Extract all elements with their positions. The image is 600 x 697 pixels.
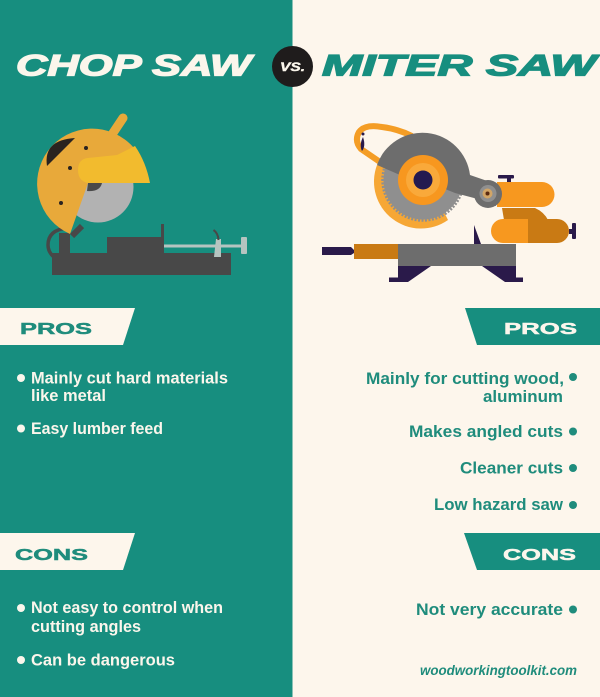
text: miter saw pros list: Low hazard saw (434, 496, 563, 514)
text: chop saw pros list: Easy lumber feed (31, 420, 163, 438)
banner: chop saw cons (0, 533, 135, 570)
text: chop saw cons list: Can be dangerous (31, 652, 175, 670)
text: miter saw pros list: Cleaner cuts (460, 460, 563, 478)
text: miter saw pros list (366, 370, 577, 514)
panel: miter saw background (292, 0, 600, 697)
banner: chop saw pros: PROS (20, 321, 93, 338)
icon: chop saw (37, 118, 247, 275)
panel: chop saw background (0, 0, 292, 697)
text: chop saw cons list: Not easy to control when (31, 599, 223, 617)
banner: miter saw pros: PROS (504, 321, 578, 338)
text: miter saw pros list: Mainly for cutting wood, (366, 370, 564, 388)
badge: vs (272, 46, 313, 87)
banner: chop saw cons: CONS (15, 547, 89, 564)
text: chop saw cons list: cutting angles (31, 618, 141, 636)
banner: miter saw cons (464, 533, 600, 570)
text: website credit: woodworkingtoolkit.com (420, 663, 577, 678)
text: chop saw cons list (17, 599, 223, 670)
title: miter saw: MITER SAW (322, 50, 600, 82)
badge: vs: VS. (280, 60, 305, 74)
icon: miter saw (322, 126, 576, 282)
text: miter saw pros list: Makes angled cuts (409, 423, 563, 441)
title: chop saw: CHOP SAW (16, 50, 255, 82)
text: chop saw pros list (17, 370, 228, 438)
banner: miter saw pros (465, 308, 600, 345)
banner: miter saw cons: CONS (503, 547, 577, 564)
text: chop saw pros list: Mainly cut hard materials (31, 370, 228, 388)
text: miter saw pros list: aluminum (483, 388, 563, 406)
text: miter saw cons list: Not very accurate (416, 601, 563, 619)
banner: chop saw pros (0, 308, 135, 345)
text: chop saw pros list: like metal (31, 387, 106, 405)
